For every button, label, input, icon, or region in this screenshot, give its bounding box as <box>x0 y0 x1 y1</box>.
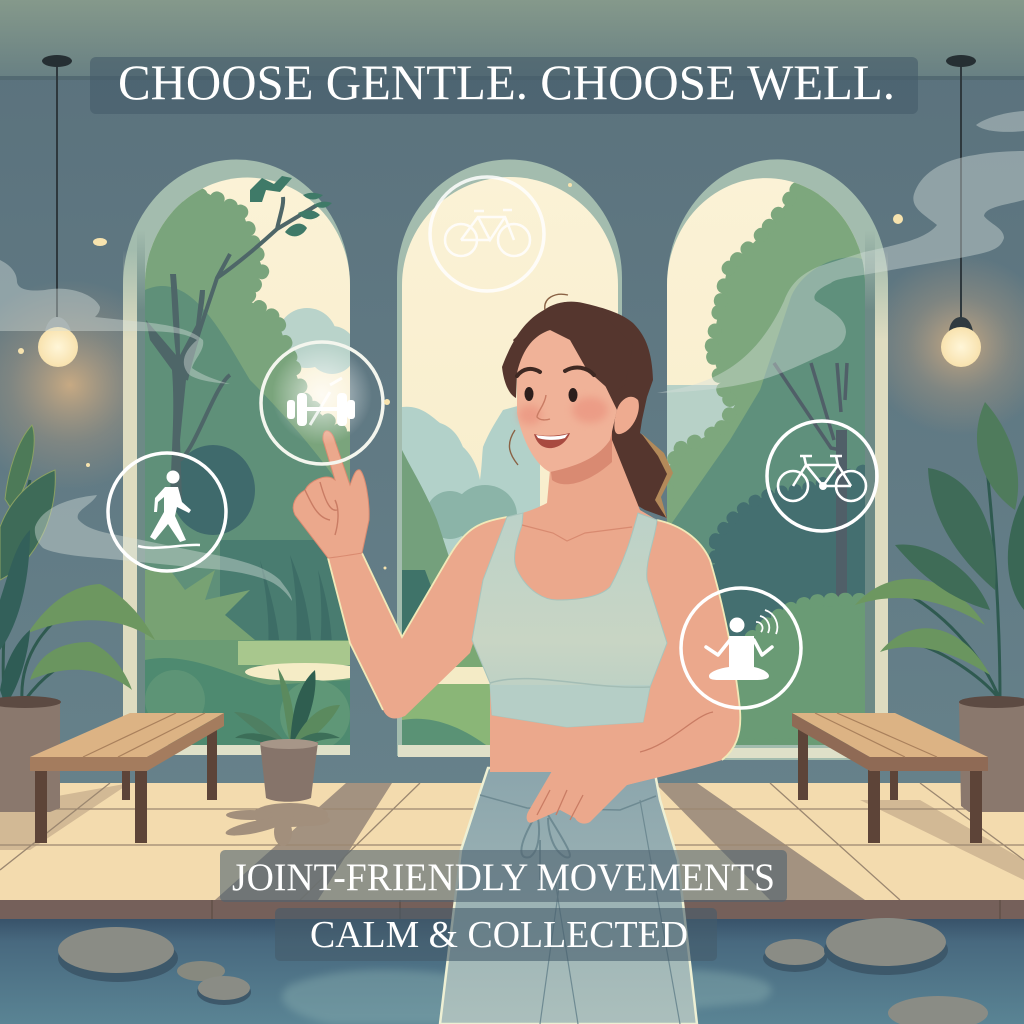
water reflections <box>282 970 772 1024</box>
finger creases <box>305 482 338 535</box>
pants <box>440 768 697 1024</box>
hair wisp <box>509 294 568 465</box>
wooden deck floor <box>0 783 1024 919</box>
arm rim light <box>328 517 507 710</box>
caption: calm and collected: CALM & COLLECTED <box>310 914 688 956</box>
left pot <box>0 696 61 812</box>
left bench <box>30 713 224 843</box>
right arched window <box>667 159 888 760</box>
cheeks <box>518 397 608 425</box>
pendant lamp right <box>941 55 981 367</box>
eyes <box>524 387 578 402</box>
hair back and ponytail <box>513 302 672 518</box>
right plant <box>855 402 1024 700</box>
left arched window <box>123 159 365 755</box>
arm outer rim <box>657 520 740 760</box>
title banner: CHOOSE GENTLE. CHOOSE WELL. <box>118 54 895 110</box>
nose <box>537 395 550 420</box>
middle arched window <box>397 159 622 757</box>
raised left arm <box>328 517 507 718</box>
lamp glow <box>0 255 1024 490</box>
pendant lamp left <box>38 55 78 367</box>
lower hand <box>527 752 722 824</box>
sparkles <box>18 183 903 570</box>
hand creases <box>537 712 713 820</box>
small potted plant <box>234 668 340 802</box>
right arm <box>590 520 740 785</box>
eyebrows <box>517 368 594 376</box>
left plant <box>0 425 155 705</box>
floor shadow of small plant <box>224 803 330 846</box>
icon: meditation <box>681 588 801 708</box>
mist swirls <box>0 111 1024 601</box>
icon: dumbbell <box>261 342 383 464</box>
woman <box>293 294 740 1024</box>
pointing hand <box>293 431 369 558</box>
hair front <box>502 302 633 398</box>
caption: calm and collected <box>275 908 717 961</box>
icon: bicycle top <box>430 177 544 291</box>
tank top <box>472 513 667 727</box>
neck shadow <box>550 430 612 484</box>
back wall <box>0 0 1024 790</box>
collar line <box>522 525 632 541</box>
face <box>517 330 617 472</box>
icon: walking person <box>108 453 226 571</box>
torso skin <box>472 440 667 772</box>
right pot <box>959 696 1024 812</box>
caption: joint-friendly movements: JOINT-FRIENDLY MOVEMENTS <box>232 856 775 899</box>
smile <box>534 433 570 448</box>
ponytail highlight <box>641 433 673 519</box>
water pool <box>0 919 1024 1024</box>
ear <box>614 397 639 434</box>
right bench <box>792 713 988 843</box>
icon: bicycle right <box>767 421 877 531</box>
pool stones <box>58 918 988 1024</box>
teeth <box>536 434 568 440</box>
